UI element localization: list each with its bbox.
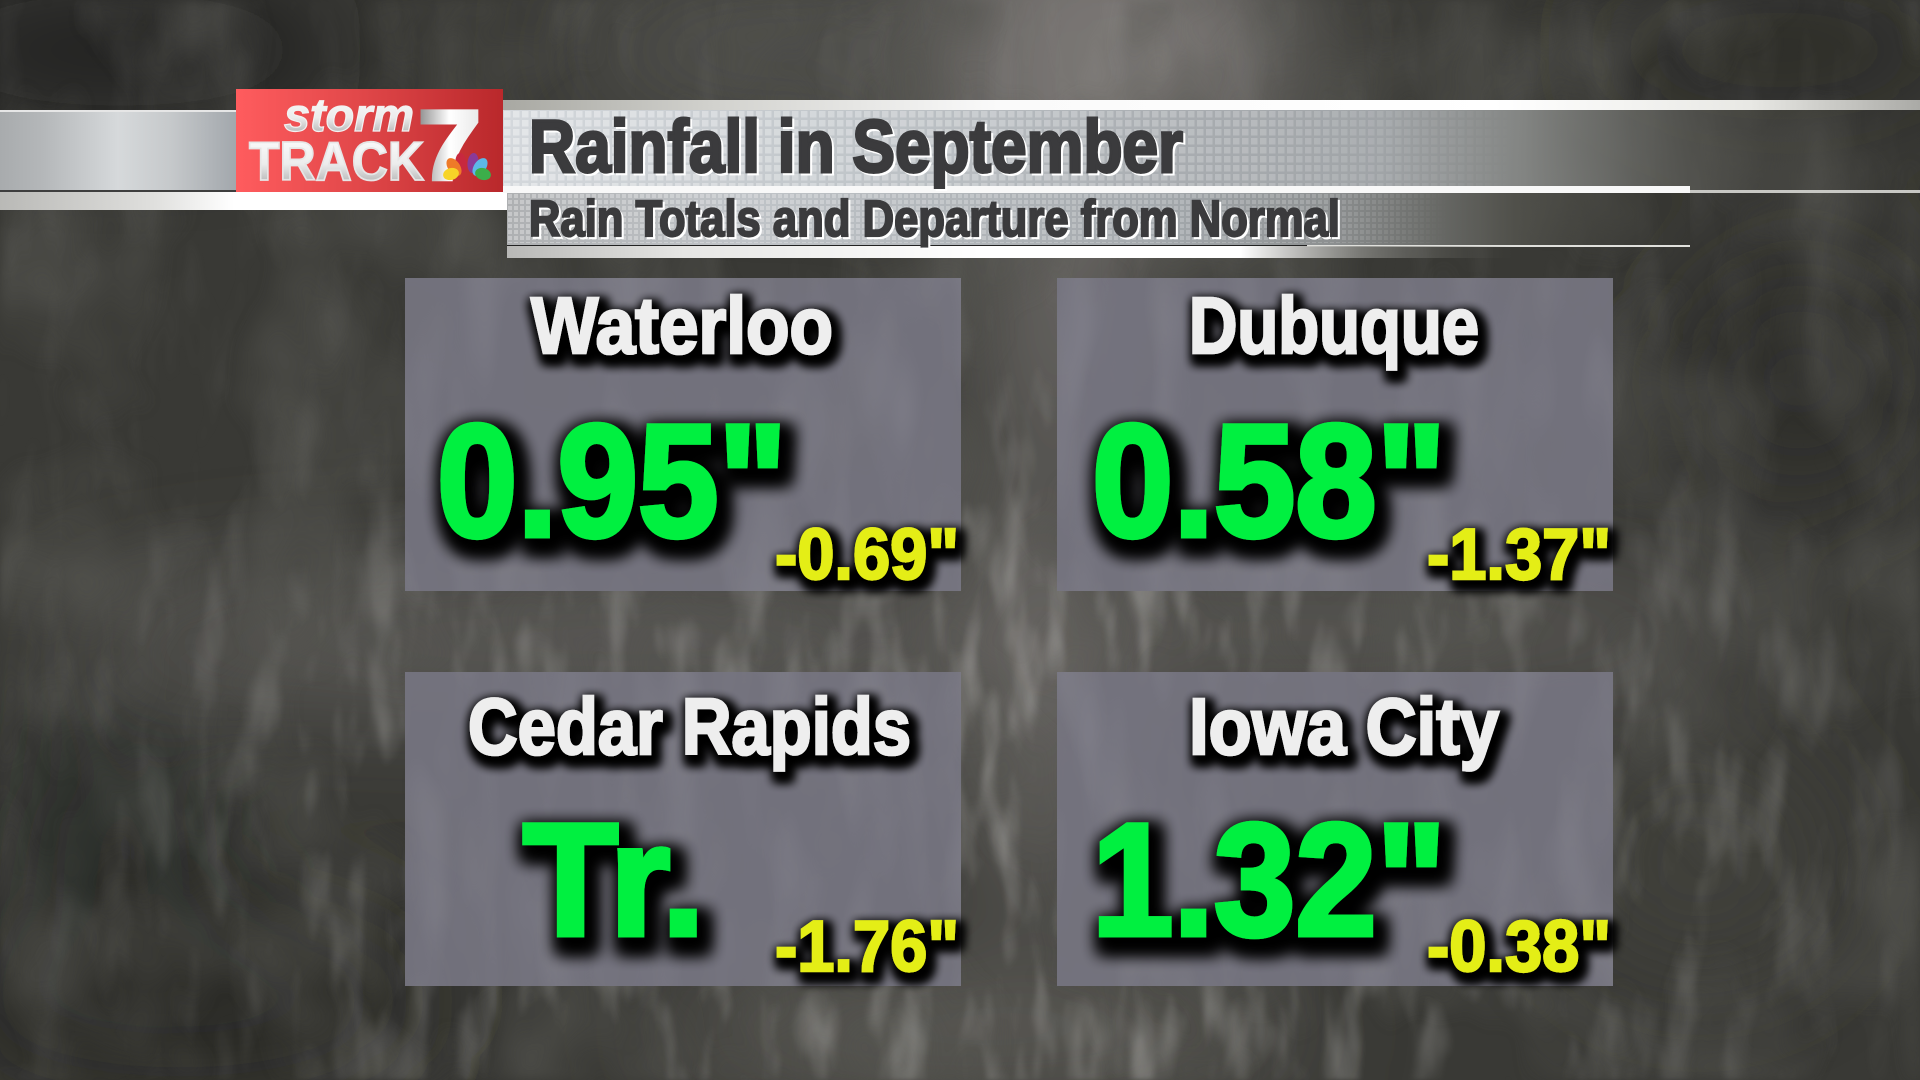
departure from normal: -1.37" [1427, 515, 1611, 595]
right band [503, 110, 1920, 190]
city name: Dubuque [1189, 281, 1479, 370]
left band [0, 110, 236, 190]
panel: Waterloo [405, 278, 961, 595]
departure from normal: -1.76" [775, 907, 959, 987]
city name: Iowa City [1189, 682, 1499, 771]
departure from normal: -0.38" [1427, 907, 1611, 987]
top chrome strip [503, 100, 1920, 110]
header: chrome title bars [0, 100, 1920, 258]
subtitle band [507, 193, 1690, 245]
logo word: TRACK: TRACK [249, 130, 424, 192]
logo: storm TRACK 7 [236, 89, 503, 200]
lower-left white strip [0, 190, 236, 192]
departure from normal: -0.69" [775, 515, 959, 595]
city name: Cedar Rapids [468, 682, 911, 771]
title: Rainfall in September [529, 105, 1183, 188]
panel: Dubuque [1057, 278, 1613, 595]
icon: peacock [442, 152, 492, 182]
panel: Iowa City [1057, 672, 1613, 987]
logo word: storm: storm [284, 89, 414, 141]
rainfall total: 1.32" [1092, 790, 1446, 969]
rainfall total: Tr. [523, 790, 705, 969]
rainfall total: 0.58" [1092, 391, 1446, 570]
panel: Cedar Rapids [405, 672, 961, 987]
strip under main band [503, 186, 1690, 193]
city name: Waterloo [531, 281, 833, 370]
subtitle: Rain Totals and Departure from Normal [529, 190, 1340, 247]
logo numeral: 7: 7 [418, 90, 481, 200]
rainfall total: 0.95" [437, 391, 787, 570]
